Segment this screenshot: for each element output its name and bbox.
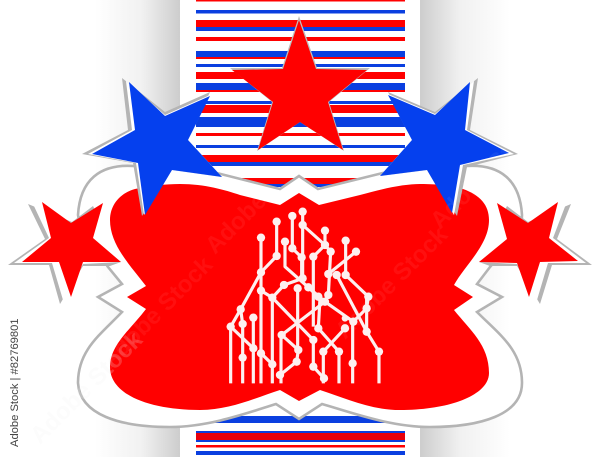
faint watermarks: Adobe Stock bbox=[95, 251, 218, 374]
right blue star bbox=[380, 78, 518, 216]
left small red star bbox=[8, 202, 121, 304]
left blue star bbox=[82, 78, 222, 216]
faint watermarks bbox=[25, 111, 548, 449]
icon: circuit tree bbox=[226, 207, 383, 383]
stripes bbox=[196, 0, 405, 455]
faint watermarks: Adobe bbox=[200, 187, 272, 259]
left background gradient bbox=[95, 0, 180, 457]
faint watermarks: Adobe Stock bbox=[425, 111, 548, 234]
badge outline bbox=[78, 166, 522, 427]
top red star bbox=[230, 16, 370, 151]
watermark id text: Adobe Stock | #82769801 bbox=[9, 318, 21, 447]
central white strip bbox=[180, 0, 420, 457]
red badge shape bbox=[110, 184, 489, 410]
right small red star bbox=[479, 202, 592, 304]
right background gradient bbox=[420, 0, 510, 457]
faint watermarks: Adobe Stock bbox=[330, 221, 453, 344]
faint watermarks: Adobe Stock bbox=[25, 326, 148, 449]
